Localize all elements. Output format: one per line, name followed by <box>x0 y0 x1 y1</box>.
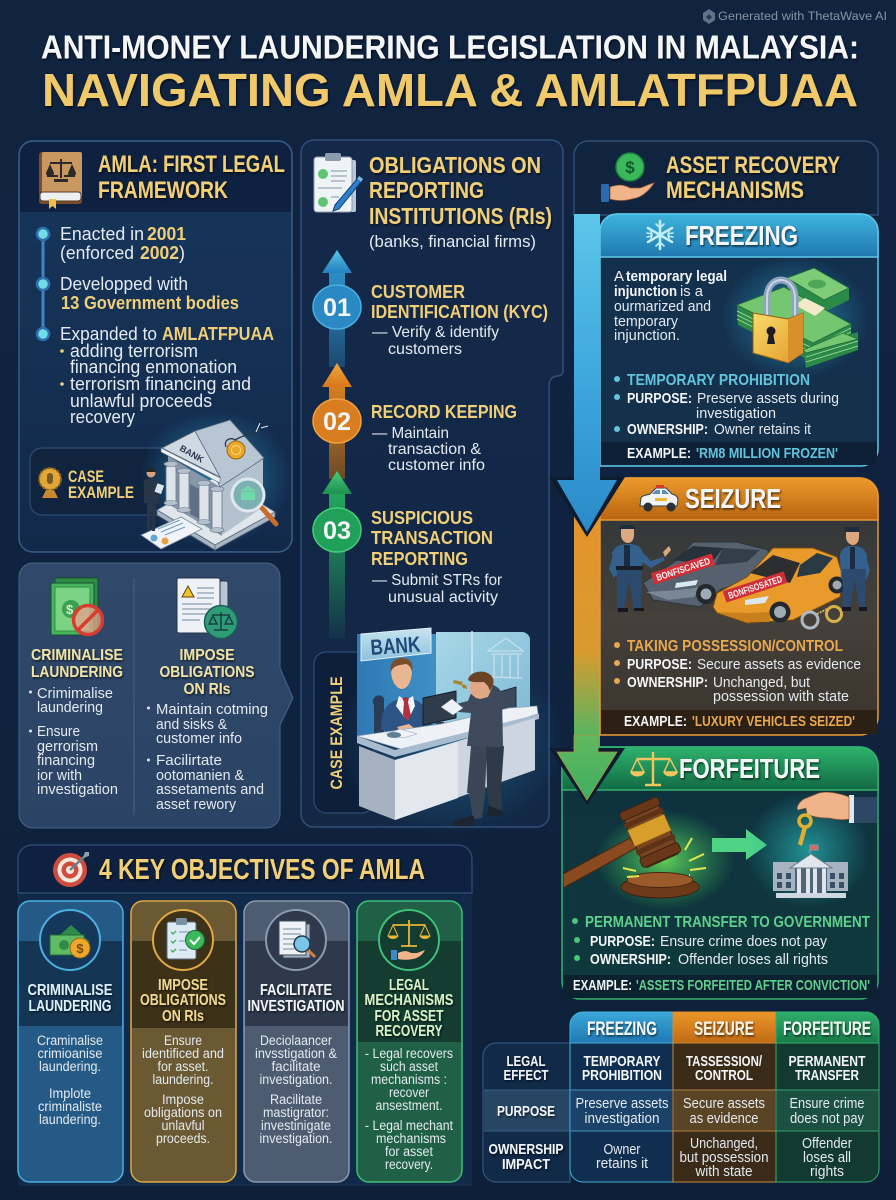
table column: freezing: TEMPORARY <box>584 1053 660 1070</box>
person <box>146 468 156 478</box>
text block: definition: injunction. <box>614 327 680 344</box>
column: impose obligations: Facilirtate <box>156 752 222 769</box>
column: criminalise laundering: financing <box>37 752 95 769</box>
table column: forfeiture: PERMANENT <box>788 1053 866 1070</box>
icon: banknotes prohibited <box>51 578 102 635</box>
column: criminalise laundering: ior with <box>37 767 82 784</box>
icon: police car <box>640 485 678 512</box>
table column: forfeiture: TRANSFER <box>795 1067 859 1084</box>
column: impose obligations: IMPOSE <box>180 647 235 664</box>
details list: OWNERSHIP: <box>627 421 708 438</box>
desk items <box>386 729 417 738</box>
heading: OBLIGATIONS ON <box>369 152 541 178</box>
card title: INVESTIGATION <box>248 998 344 1015</box>
card body: - Legal mechant <box>365 1118 453 1133</box>
card body: ansestment. <box>376 1098 442 1113</box>
column: criminalise laundering: Ensure <box>37 723 80 740</box>
table column: seizure: Secure assets <box>683 1096 765 1112</box>
icon: coin over hand <box>601 153 654 202</box>
step 03 text: unusual activity <box>388 589 498 606</box>
text block: definition: is a <box>680 283 704 300</box>
icon: document magnifier <box>266 910 326 970</box>
icon: checklist <box>153 910 213 970</box>
title: NAVIGATING AMLA & AMLATFPUAA <box>42 64 858 116</box>
arrow step 01: 01 <box>323 294 351 322</box>
card: impose obligations <box>131 901 236 1182</box>
step 01 text: CUSTOMER <box>371 282 465 302</box>
panel: seizure <box>600 478 878 735</box>
text block: history: Developped with <box>60 274 188 294</box>
arrow: transfer <box>712 829 767 860</box>
card: criminalise laundering <box>18 901 123 1182</box>
panel: forfeiture <box>562 747 882 999</box>
details list <box>614 638 861 705</box>
panel: AMLA first legal framework <box>19 141 292 552</box>
card: facilitate investigation <box>244 901 349 1182</box>
table column: freezing: FREEZING <box>587 1019 657 1040</box>
icon: scales and hand <box>379 910 439 970</box>
text block: definition: temporary legal <box>626 268 727 285</box>
details list: investigation <box>696 405 776 422</box>
heading <box>666 152 840 204</box>
table column: forfeiture: Offender <box>802 1136 852 1152</box>
card body <box>255 1033 337 1146</box>
card body: recover <box>389 1085 429 1100</box>
card body: Implote <box>49 1086 91 1101</box>
details list: PURPOSE: <box>627 656 692 673</box>
card body <box>142 1033 224 1146</box>
step 01 text: customers <box>388 341 462 358</box>
text block: definition: injunction <box>614 283 677 300</box>
text block: definition <box>614 268 727 344</box>
step 03 text <box>371 508 503 606</box>
customer <box>441 672 504 826</box>
officer right <box>840 527 870 611</box>
card title: FOR ASSET <box>374 1008 444 1025</box>
step 02 text: customer info <box>388 457 485 474</box>
card body: Impose <box>162 1092 204 1107</box>
column: impose obligations: and sisks & <box>156 716 227 733</box>
column: criminalise laundering: investigation <box>37 781 118 798</box>
illustration: bank under investigation: BANK <box>178 443 206 465</box>
panel: 4 key objectives of AMLA <box>18 845 472 1186</box>
column: impose obligations: ootomanien & <box>156 767 244 784</box>
padlock <box>767 280 795 320</box>
grey car <box>643 542 770 607</box>
card body: identificed and <box>142 1046 224 1061</box>
column: impose obligations: ON RIs <box>184 681 231 698</box>
orange car: BONFISOSATED <box>727 574 784 602</box>
table column: seizure: TASSESSION/ <box>686 1053 763 1070</box>
column: impose obligations: assetaments and <box>156 781 264 798</box>
grey car: BONFISCAVED <box>655 556 712 584</box>
watermark: Generated with ThetaWave AI <box>718 11 887 23</box>
roof <box>195 420 264 487</box>
card body <box>37 1033 103 1127</box>
card body: mastigrator: <box>263 1105 329 1120</box>
illustration: police with confiscated cars <box>609 525 870 628</box>
arrow: freezing to seizure <box>549 214 625 537</box>
card body: facilitate <box>272 1059 320 1074</box>
text block: history: unlawful proceeds <box>70 391 212 411</box>
card title: RECOVERY <box>376 1023 443 1040</box>
card title: LAUNDERING <box>28 998 112 1015</box>
example strip: 'RM8 MILLION FROZEN' <box>696 445 838 462</box>
details list <box>614 372 839 438</box>
heading: 4 KEY OBJECTIVES OF AMLA <box>99 854 425 886</box>
card body: such asset <box>380 1059 438 1074</box>
card body: criminaliste <box>38 1099 102 1114</box>
bank sign: BANK <box>370 632 421 660</box>
card title: LEGAL <box>389 977 429 994</box>
step 02 text: transaction & <box>388 441 481 458</box>
teller <box>373 658 432 734</box>
arrow step 03: 03 <box>323 517 351 545</box>
table column: seizure: CONTROL <box>695 1067 753 1084</box>
table row labels <box>483 1043 570 1182</box>
heading: SEIZURE <box>685 483 781 514</box>
table column: forfeiture: Ensure crime <box>790 1096 864 1112</box>
table column: forfeiture: loses all <box>803 1150 851 1166</box>
details list: Ensure crime does not pay <box>660 933 827 950</box>
text block: history: ) <box>179 243 185 263</box>
card body: unlavful <box>162 1118 204 1133</box>
text block: history: 2002 <box>140 243 179 263</box>
table row labels: LEGAL <box>506 1053 546 1070</box>
card title <box>248 982 344 1015</box>
column: criminalise laundering: LAUNDERING <box>31 664 123 681</box>
card body: laundering. <box>39 1112 101 1127</box>
card title <box>140 977 226 1025</box>
table column: freezing: Owner <box>604 1142 641 1158</box>
monitor <box>423 691 456 725</box>
watermark <box>703 9 887 24</box>
text block: history: Expanded to <box>60 324 157 344</box>
callout: case example <box>30 448 175 515</box>
example strip: EXAMPLE: <box>573 977 632 994</box>
text block: history: terrorism financing and <box>70 374 251 394</box>
impact rays <box>623 838 706 877</box>
card body: - Legal recovers <box>365 1046 453 1061</box>
card body: laundering. <box>39 1059 101 1074</box>
block <box>620 880 700 898</box>
icon: scales <box>631 752 677 785</box>
details list: Owner retains it <box>714 421 812 438</box>
card title: ON RIs <box>162 1008 204 1025</box>
text block: history: financing enmonation <box>70 357 237 377</box>
step 02 text: RECORD KEEPING <box>371 402 517 422</box>
text block: history: adding terrorism <box>70 341 198 361</box>
card body: mechanisms : <box>371 1072 447 1087</box>
officer left <box>609 525 671 612</box>
column: impose obligations: customer info <box>156 730 242 747</box>
icon: cash and coin: $ <box>76 941 84 956</box>
sidebar ribbon <box>574 214 600 748</box>
text block: history: Enacted in <box>60 224 144 244</box>
column: impose obligations <box>147 647 268 813</box>
heading: FORFEITURE <box>679 753 820 784</box>
table row labels: PURPOSE <box>497 1103 555 1120</box>
text block: history: recovery <box>70 407 135 427</box>
timeline <box>37 228 49 340</box>
details list: TEMPORARY PROHIBITION <box>627 372 810 389</box>
arrow step 02: 02 <box>323 408 351 436</box>
callout: case example: EXAMPLE <box>68 483 134 502</box>
card body: investigation. <box>260 1072 332 1087</box>
heading: INSTITUTIONS (RIs) <box>369 203 552 229</box>
document <box>141 517 202 549</box>
icon: cash and coin <box>40 910 100 970</box>
heading: REPORTING <box>369 177 484 203</box>
step 02 text <box>371 402 517 474</box>
table column: forfeiture: rights <box>810 1164 844 1180</box>
step 01 text: IDENTIFICATION (KYC) <box>371 302 548 322</box>
cash stacks <box>787 268 849 312</box>
icon: target <box>53 852 89 887</box>
step 03 text: — Submit STRs for <box>372 572 503 589</box>
table column: seizure <box>673 1012 776 1182</box>
text block: history: AMLATFPUAA <box>162 324 274 344</box>
details list: Preserve assets during <box>697 390 839 407</box>
column: criminalise laundering: CRIMINALISE <box>31 647 123 664</box>
column: criminalise laundering: laundering <box>37 699 103 716</box>
card body: obligations on <box>144 1105 222 1120</box>
handcuffs <box>802 606 842 628</box>
step 03 text: REPORTING <box>371 549 468 569</box>
icon: banknotes prohibited: $ <box>66 602 74 617</box>
comparison table <box>483 1012 879 1182</box>
step 03 text: SUSPICIOUS <box>371 508 473 528</box>
card body: recovery. <box>385 1157 433 1172</box>
column: criminalise laundering <box>29 647 123 798</box>
card body: laundering. <box>152 1072 214 1087</box>
card title: IMPOSE <box>158 977 208 994</box>
details list: possession with state <box>713 688 849 705</box>
base steps <box>157 476 275 545</box>
card title: CRIMINALISE <box>28 982 112 999</box>
text block: definition: A <box>614 268 624 285</box>
table row labels: EFFECT <box>504 1067 548 1084</box>
table column: seizure: as evidence <box>690 1111 758 1127</box>
card body: proceeds. <box>156 1131 210 1146</box>
column: impose obligations: OBLIGATIONS <box>160 664 255 681</box>
text block: history: (enforced <box>60 243 134 263</box>
heading <box>98 151 285 204</box>
illustration: bank counter <box>335 628 565 835</box>
step 02 text: — Maintain <box>372 425 449 442</box>
panel: criminalise and obligations <box>19 563 293 828</box>
callout: case example: CASE <box>68 467 104 486</box>
details list: Offender loses all rights <box>678 951 828 968</box>
card body: crimioanise <box>38 1046 102 1061</box>
columns <box>166 466 222 532</box>
icon: clipboard and pen <box>314 153 363 212</box>
step 01 text: — Verify & identify <box>372 324 499 341</box>
text block: history: 13 Government bodies <box>61 293 239 313</box>
table column: seizure: but possession <box>680 1150 768 1166</box>
card: legal mechanisms <box>357 901 462 1182</box>
column: criminalise laundering: gerrorism <box>37 738 98 755</box>
illustration: hand, key and government building <box>752 792 877 902</box>
details list: PURPOSE: <box>590 933 655 950</box>
column: criminalise laundering: Crimimalise <box>37 685 113 702</box>
heading: FRAMEWORK <box>98 177 229 204</box>
details list: TAKING POSSESSION/CONTROL <box>627 638 843 655</box>
heading: MECHANISMS <box>666 177 804 204</box>
column: impose obligations: asset rewory <box>156 796 236 813</box>
table column: seizure: with state <box>695 1164 752 1180</box>
handle <box>563 838 636 888</box>
head <box>619 796 682 869</box>
heading: AMLA: FIRST LEGAL <box>98 151 285 178</box>
card body: investigation. <box>260 1131 332 1146</box>
illustration: gavel <box>563 796 735 910</box>
example strip <box>624 713 855 730</box>
table column: freezing: investigation <box>584 1111 660 1127</box>
heading: FREEZING <box>685 220 798 251</box>
table column: seizure: Unchanged, <box>690 1136 758 1152</box>
panel: obligations on reporting institutions <box>301 140 565 835</box>
card body: investinigate <box>261 1118 331 1133</box>
arrow step 03 <box>313 471 361 639</box>
walls <box>168 456 222 536</box>
details list: PURPOSE: <box>627 390 692 407</box>
table row labels: OWNERSHIP <box>488 1141 564 1158</box>
counter <box>357 706 538 749</box>
step 01 text <box>371 282 548 358</box>
card title: FACILITATE <box>260 982 332 999</box>
table column: freezing: retains it <box>596 1156 648 1172</box>
table column: freezing: PROHIBITION <box>582 1067 662 1084</box>
icon: coin over hand: $ <box>625 158 635 177</box>
callout: case example strip <box>314 652 374 813</box>
text block: history: 2001 <box>147 224 186 244</box>
magnifier <box>262 508 276 524</box>
card title <box>28 982 112 1015</box>
heading: ASSET RECOVERY <box>666 152 840 179</box>
details list: OWNERSHIP: <box>627 674 708 691</box>
example strip <box>627 445 838 462</box>
title <box>41 28 859 116</box>
table row labels: IMPACT <box>502 1156 550 1173</box>
card body: Ensure <box>164 1033 202 1048</box>
card title <box>364 977 454 1040</box>
card body: for asset. <box>158 1059 208 1074</box>
column: impose obligations: Maintain cotming <box>156 701 268 718</box>
illustration: bank under investigation <box>139 410 291 550</box>
crack with coin <box>225 430 260 447</box>
arrow step 01 <box>313 250 361 367</box>
details list: OWNERSHIP: <box>590 951 671 968</box>
card body <box>365 1046 453 1172</box>
card body: Deciolaancer <box>260 1033 332 1048</box>
card title: MECHANISMS <box>364 992 454 1009</box>
text block: definition: temporary <box>614 313 678 330</box>
second monitor <box>496 687 516 716</box>
panel: asset recovery mechanisms header <box>574 141 878 215</box>
card body: for asset <box>385 1144 433 1159</box>
building outline <box>488 638 523 678</box>
table column: forfeiture <box>776 1012 879 1182</box>
arrow step 02 <box>313 363 361 479</box>
text block: history <box>60 224 274 427</box>
card body: Craminalise <box>37 1033 103 1048</box>
example strip: EXAMPLE: <box>624 713 687 730</box>
example strip: EXAMPLE: <box>627 445 691 462</box>
arrow: seizure to forfeiture <box>549 735 625 805</box>
table column: seizure: SEIZURE <box>694 1019 754 1040</box>
details list <box>572 914 870 968</box>
icon: document with scales <box>177 578 238 638</box>
card title: OBLIGATIONS <box>140 992 226 1009</box>
example strip: 'LUXURY VEHICLES SEIZED' <box>692 713 855 730</box>
card body: mechanisms <box>376 1131 446 1146</box>
step 03 text: TRANSACTION <box>371 528 493 548</box>
details list: Unchanged, but <box>713 674 811 691</box>
callout: case example strip: CASE EXAMPLE <box>327 676 346 790</box>
text block: definition: ourmarized and <box>614 298 711 315</box>
details list: Secure assets as evidence <box>697 656 861 673</box>
subheading: (banks, financial firms) <box>369 233 536 251</box>
icon: law book <box>39 152 82 209</box>
table column: forfeiture: does not pay <box>790 1111 865 1127</box>
panel: freezing <box>600 214 878 466</box>
heading <box>369 152 552 229</box>
card body: invsstigation & <box>255 1046 337 1061</box>
orange car <box>713 548 846 623</box>
table column: freezing <box>570 1012 673 1182</box>
illustration: locked cash <box>720 256 870 380</box>
card body: Racilitate <box>270 1092 322 1107</box>
icon: snowflake <box>647 221 673 249</box>
table column: freezing: Preserve assets <box>576 1096 668 1112</box>
